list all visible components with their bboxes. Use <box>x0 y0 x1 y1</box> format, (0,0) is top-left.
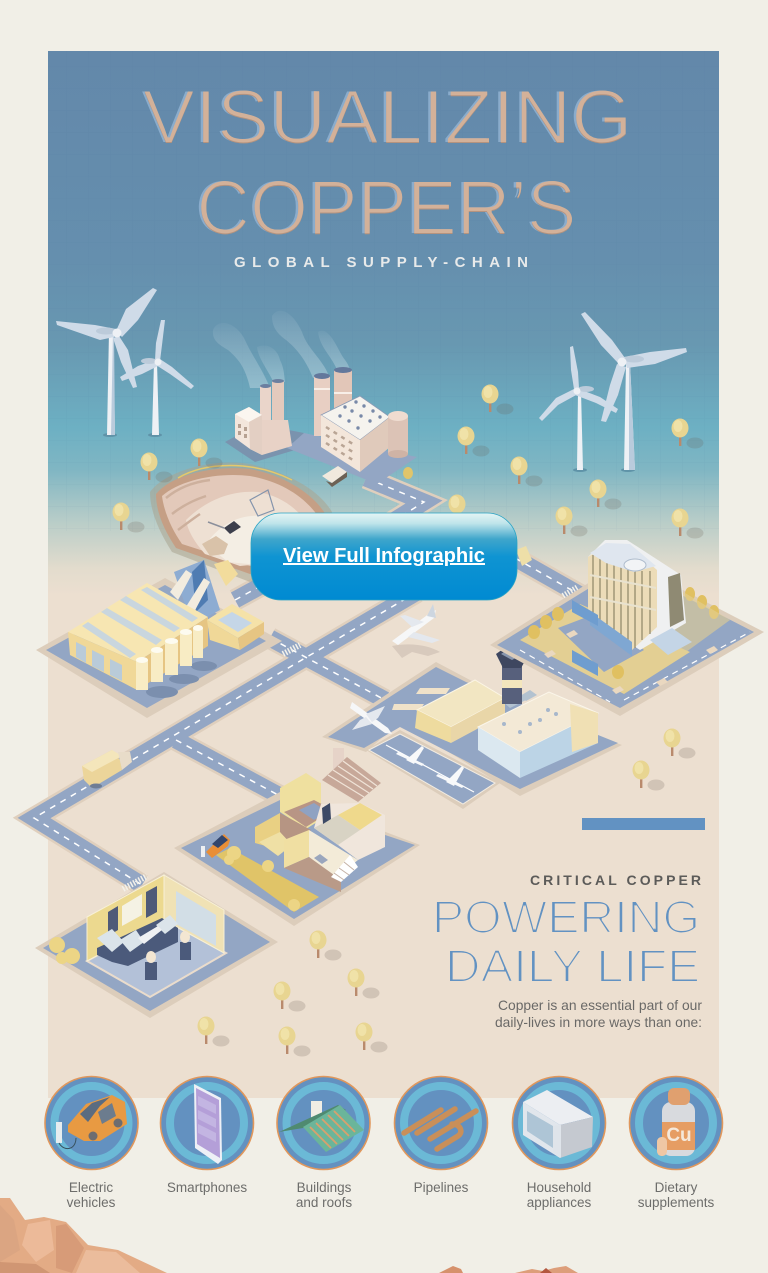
roof <box>322 757 381 802</box>
corporate sign 2 <box>572 650 598 676</box>
icon: buildings and roofs <box>277 1076 370 1170</box>
house <box>174 748 420 926</box>
road network: edge <box>34 478 582 885</box>
truck <box>322 466 347 487</box>
label: household appliances: Household <box>527 1180 591 1195</box>
garden <box>216 848 319 912</box>
title line: VISUALIZING: VISUALIZING <box>142 76 632 161</box>
annex building <box>207 604 264 650</box>
shrubs <box>224 846 300 911</box>
truck on hq road <box>516 546 532 566</box>
main tower <box>588 540 692 656</box>
icon: smartphones <box>160 1076 254 1170</box>
blue processing towers <box>170 560 238 625</box>
staircase <box>331 855 358 882</box>
road network: lane markings <box>34 478 582 885</box>
button: view full infographic <box>251 513 517 600</box>
icon: dietary supplements: Cu <box>666 1125 692 1146</box>
display plinths <box>145 942 191 980</box>
section accent bar <box>582 818 705 830</box>
intro text: Copper is an essential part of our <box>498 997 702 1013</box>
subtitle: GLOBAL SUPPLY-CHAIN <box>234 254 528 271</box>
parked airliner <box>350 702 392 734</box>
electric car <box>206 834 230 858</box>
open-pit mine <box>150 462 335 582</box>
hangar roof <box>68 583 208 662</box>
small plant building <box>235 407 262 455</box>
small plane 1 <box>396 746 424 766</box>
chimney <box>333 748 344 776</box>
section heading <box>432 872 702 1030</box>
back left wall <box>87 875 164 961</box>
button: view full infographic: View Full Infographic <box>283 545 485 567</box>
label: household appliances: appliances <box>527 1195 592 1210</box>
parked cars <box>544 630 718 694</box>
kitchen room <box>284 830 358 892</box>
power plant <box>225 367 417 487</box>
corporate sign 1 <box>572 600 598 626</box>
plane in flight <box>392 604 440 658</box>
label: electric vehicles: Electric <box>69 1180 113 1195</box>
turbine 2 <box>120 320 194 437</box>
intro text <box>495 997 702 1030</box>
control tower <box>496 644 529 704</box>
turbine 4 <box>539 346 618 472</box>
copper rock: right <box>515 1266 578 1273</box>
terminal wing <box>415 680 505 743</box>
display counter <box>97 915 178 966</box>
road network: asphalt <box>34 478 582 885</box>
pit rim <box>150 462 335 582</box>
hangar right wall <box>137 617 208 690</box>
roof skylights <box>82 587 198 658</box>
yellow shrub <box>403 467 413 479</box>
title <box>140 75 632 271</box>
terminal main hall <box>478 690 598 778</box>
shrubs <box>49 937 80 964</box>
jewellery busts <box>146 931 190 963</box>
excavator <box>208 490 274 534</box>
intro text: daily-lives in more ways than one: <box>495 1014 702 1030</box>
smoke plumes <box>213 311 350 388</box>
title line: VISUALIZING: VISUALIZING <box>142 75 632 160</box>
shop lot <box>35 872 278 1018</box>
zebra crossings <box>123 587 578 889</box>
rear bedroom <box>280 773 333 829</box>
large plant building <box>321 396 390 472</box>
large plant chimneys <box>314 367 352 436</box>
label: smartphones: Smartphones <box>167 1180 247 1195</box>
small plane 2 <box>436 766 464 788</box>
complex lot <box>490 560 764 716</box>
copper rock: centre <box>439 1266 463 1273</box>
copper uses icons <box>45 1076 722 1170</box>
copper rock: left <box>0 1198 167 1273</box>
living room <box>314 803 385 860</box>
icon: dietary supplements <box>630 1076 722 1170</box>
label: dietary supplements: Dietary <box>655 1180 697 1195</box>
factory <box>36 560 282 718</box>
label: dietary supplements: supplements <box>638 1195 715 1210</box>
kicker: CRITICAL COPPER <box>530 872 701 888</box>
wall windows <box>176 891 216 946</box>
label: pipelines: Pipelines <box>414 1180 469 1195</box>
icon: pipelines <box>394 1076 488 1170</box>
trees <box>112 384 704 1056</box>
copper silos <box>136 625 217 698</box>
road bands <box>520 632 750 702</box>
plant lot <box>225 424 304 462</box>
small plant chimneys <box>258 379 292 455</box>
shop floor <box>87 920 226 997</box>
icon labels <box>67 1180 715 1210</box>
label: electric vehicles: vehicles <box>67 1195 116 1210</box>
label: buildings and roofs: Buildings <box>297 1180 351 1195</box>
heading: powering daily life: POWERING <box>432 891 700 943</box>
icon: electric vehicles <box>45 1076 138 1170</box>
heading: powering daily life: DAILY LIFE <box>445 940 700 992</box>
wall displays <box>108 886 157 936</box>
storage silo <box>388 411 408 458</box>
pit terraces <box>162 475 318 566</box>
icon: household appliances <box>512 1076 606 1170</box>
turbine 3 <box>581 312 687 472</box>
factory lot <box>36 578 282 718</box>
wind turbines <box>56 288 687 472</box>
airport <box>322 604 622 809</box>
back right wall <box>164 875 224 953</box>
closet room <box>255 813 311 856</box>
title line: VISUALIZING: VISUALIZING <box>140 75 630 160</box>
gardens <box>520 587 730 694</box>
house lot <box>174 792 420 926</box>
delivery truck on main road <box>82 750 132 788</box>
headquarters complex <box>490 540 764 716</box>
title line: COPPER'S: COPPER’S <box>196 165 576 251</box>
panel: sky to sand background <box>48 51 719 1098</box>
roads <box>34 478 582 889</box>
title line: COPPER'S: COPPER’S <box>196 166 576 252</box>
label: buildings and roofs: and roofs <box>296 1195 352 1210</box>
heading: powering daily life <box>432 891 700 992</box>
jewellery shop <box>35 872 278 1018</box>
title line: COPPER'S: COPPER’S <box>194 165 574 251</box>
runway <box>366 730 500 809</box>
turbine 1 <box>56 288 157 437</box>
dump truck <box>202 536 228 556</box>
charger <box>201 846 205 857</box>
airport lot <box>322 662 622 796</box>
hangar left wall <box>68 632 137 690</box>
